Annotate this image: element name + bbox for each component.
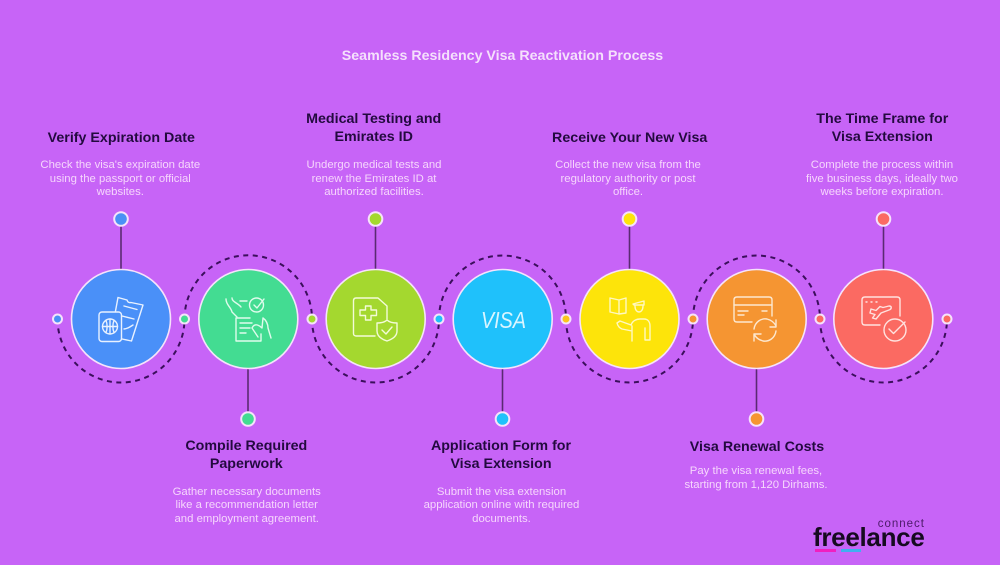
step 7 heading: The Time Frame for — [816, 111, 948, 127]
step 6 heading: Visa Renewal Costs — [690, 438, 824, 454]
step 6 description — [684, 465, 828, 491]
step 6 description: starting from 1,120 Dirhams. — [684, 479, 828, 491]
step 4 heading: Visa Extension — [450, 456, 552, 472]
step 4 heading — [431, 438, 571, 472]
step 5 description: Collect the new visa from the — [555, 159, 701, 171]
step 1 heading: Verify Expiration Date — [48, 130, 195, 146]
step 2 description: like a recommendation letter — [175, 499, 318, 511]
step 4 circle: visa wordmark — [453, 270, 552, 368]
step 3 heading: Emirates ID — [334, 129, 413, 145]
step 7 description: Complete the process within — [811, 159, 953, 171]
step 5 description: regulatory authority or post — [561, 173, 695, 185]
step 3 description: renew the Emirates ID at — [312, 173, 436, 185]
step 2 heading — [185, 438, 307, 472]
step 2 heading: Paperwork — [210, 456, 283, 472]
step 3 heading — [306, 111, 441, 145]
step 2 description — [173, 486, 321, 525]
step 3 heading: Medical Testing and — [306, 111, 441, 127]
step 4 heading: Application Form for — [431, 438, 571, 454]
step 7 circle: browser, plane and check icon — [834, 270, 933, 368]
step 1 description: Check the visa's expiration date — [40, 159, 200, 171]
step 5 description — [555, 159, 701, 198]
logo: freelance connect: freelance — [813, 522, 924, 552]
step 4 description — [424, 486, 579, 525]
step 2 description: and employment agreement. — [174, 513, 319, 525]
step 5 description: office. — [613, 186, 643, 198]
step 7 description — [806, 159, 958, 198]
step 1 circle: passport and ticket icon — [72, 270, 170, 368]
step 1 description: using the passport or official — [50, 173, 191, 185]
step 7 description: five business days, ideally two — [806, 173, 958, 185]
step nodes on path — [53, 314, 952, 324]
title: Seamless Residency Visa Reactivation Process — [342, 48, 663, 64]
step 1 description: websites. — [97, 186, 144, 198]
step 3 description: authorized facilities. — [324, 186, 424, 198]
step 4 circle: visa wordmark: VISA — [481, 307, 526, 333]
step 4 description: documents. — [472, 513, 531, 525]
step 7 heading — [816, 111, 948, 145]
step 6 description: Pay the visa renewal fees, — [690, 465, 822, 477]
step 2 circle: documents and check icon — [199, 270, 298, 368]
step 2 heading: Compile Required — [185, 438, 307, 454]
step 6 circle: credit card renewal icon — [707, 270, 806, 368]
step 3 circle: medical document and shield icon — [326, 270, 425, 368]
step 1 description — [40, 159, 200, 198]
leader end dots — [114, 212, 890, 426]
step 3 description: Undergo medical tests and — [307, 159, 441, 171]
step 5 circle: officer handing document icon — [580, 270, 679, 368]
step 3 description — [307, 159, 441, 198]
step 4 description: application online with required — [424, 499, 579, 511]
leader lines — [121, 224, 884, 414]
step 7 description: weeks before expiration. — [821, 186, 943, 198]
step 2 description: Gather necessary documents — [173, 486, 321, 498]
step 5 heading: Receive Your New Visa — [552, 130, 707, 146]
logo: freelance connect: connect — [878, 518, 925, 530]
step 4 description: Submit the visa extension — [437, 486, 566, 498]
dashed connector path — [58, 255, 947, 382]
step 7 heading: Visa Extension — [832, 129, 933, 145]
